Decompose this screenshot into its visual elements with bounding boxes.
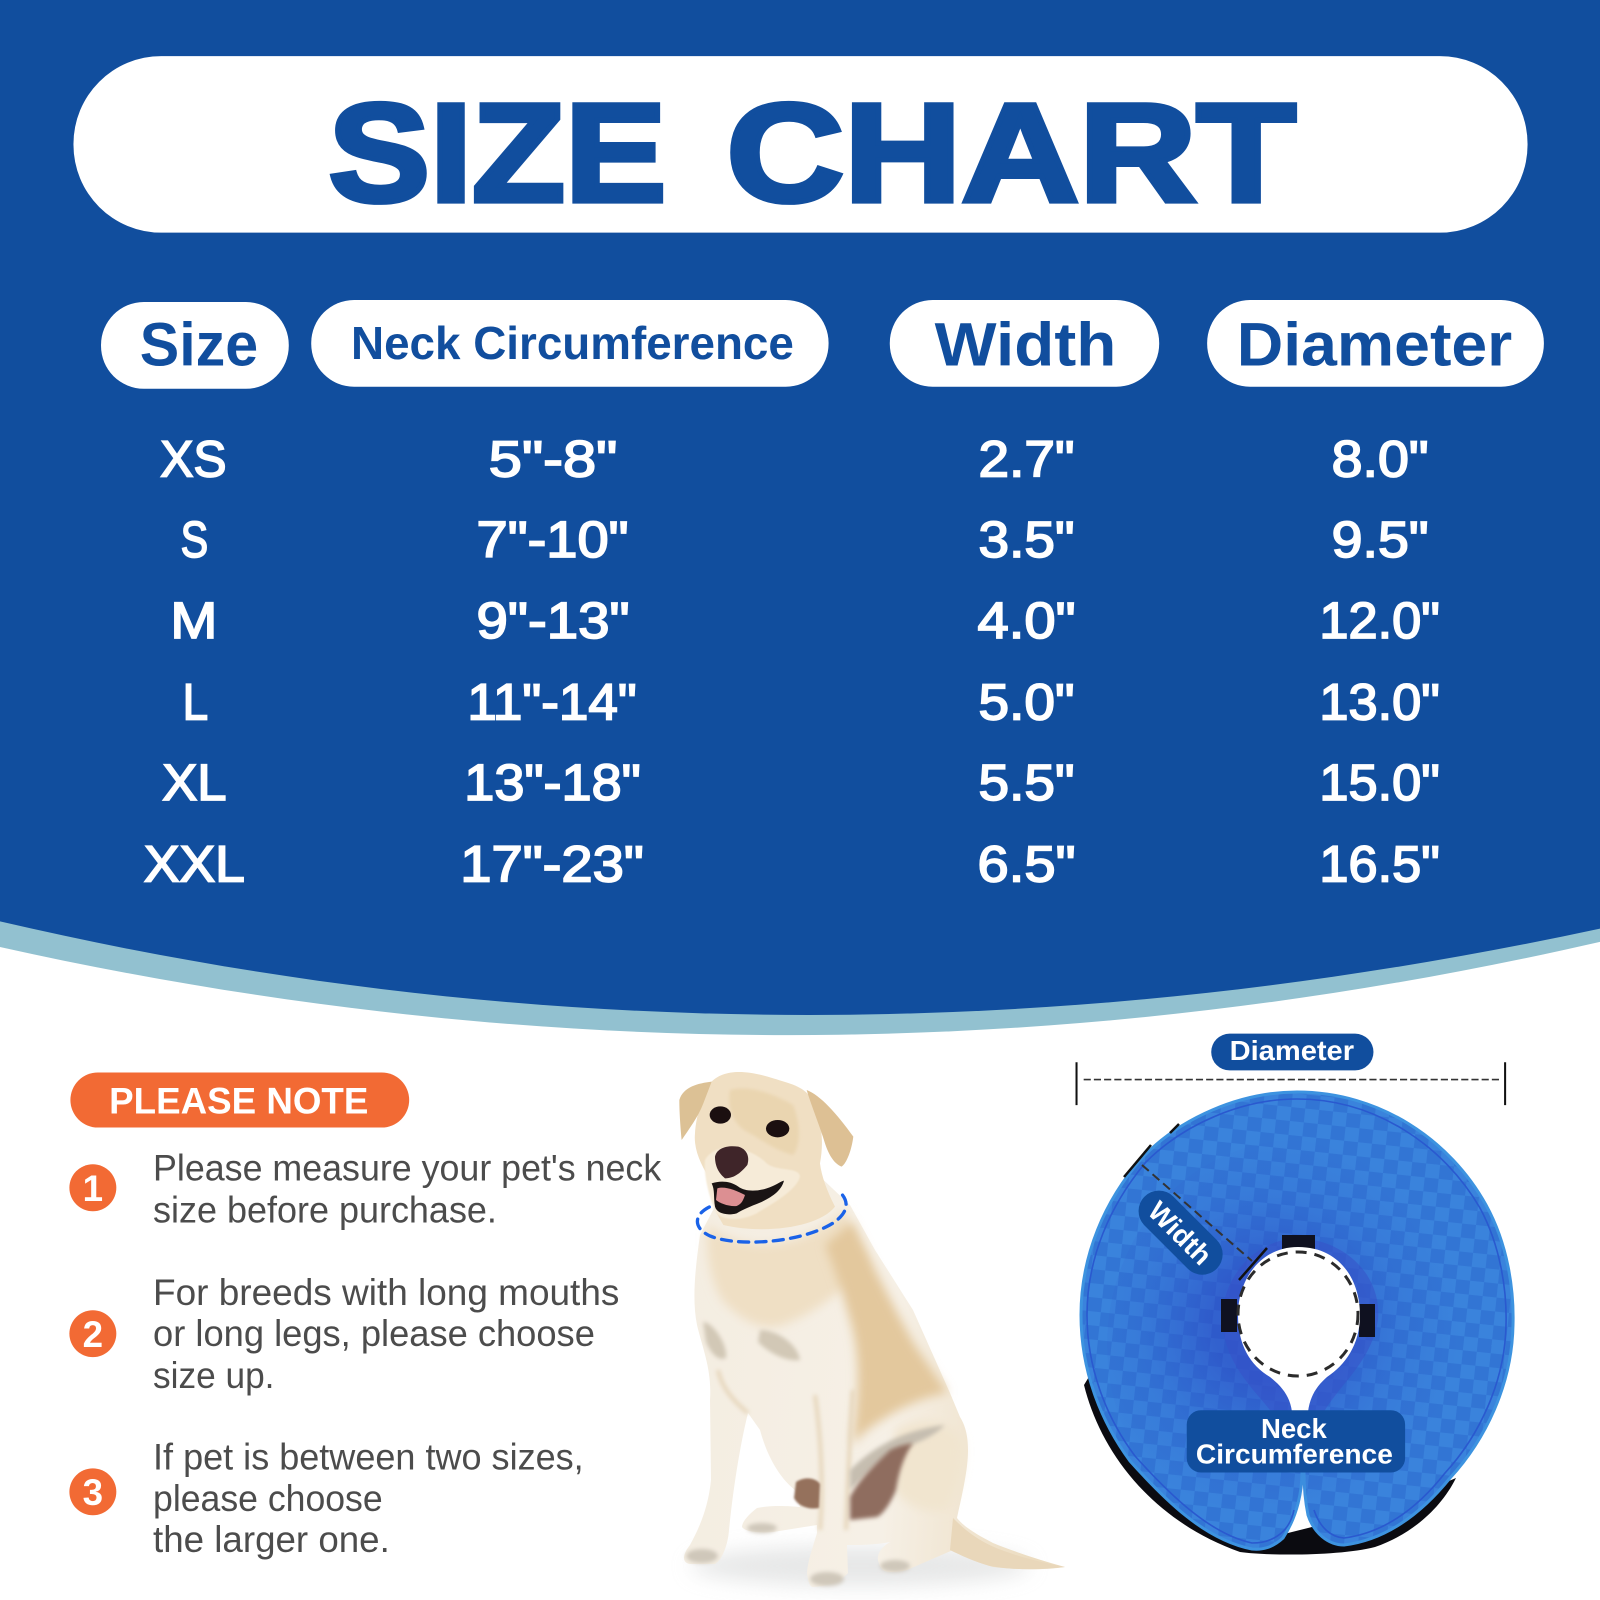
floor shadow [690, 1546, 1030, 1586]
header: width: Width [935, 310, 1116, 378]
title [73, 56, 1528, 233]
column: size: XL [162, 754, 227, 811]
label: neck circumference: Neck [1261, 1413, 1327, 1444]
column: neck circumference: 5"-8" [489, 431, 617, 488]
note 1: size before purchase. [153, 1189, 497, 1230]
column: size: M [170, 592, 217, 649]
header: diameter [1207, 300, 1544, 387]
column: width [978, 431, 1076, 893]
diameter measure [1077, 1034, 1505, 1105]
note 3: If pet is between two sizes, [153, 1436, 584, 1477]
note 2: size up. [153, 1355, 274, 1396]
width guide line [1142, 1165, 1252, 1261]
hind thigh [895, 1421, 963, 1511]
illustration: sitting dog [679, 1072, 1065, 1587]
left eye [710, 1106, 731, 1124]
label: diameter: Diameter [1230, 1035, 1354, 1066]
header: size: Size [140, 310, 258, 378]
header: neck circumference: Neck Circumference [351, 317, 794, 369]
note 2: or long legs, please choose [153, 1313, 595, 1354]
front leg edges [718, 1370, 853, 1530]
mouth [712, 1181, 784, 1214]
note 3: 3 [83, 1472, 103, 1513]
note 1: Please measure your pet's neck [153, 1148, 662, 1189]
curved light band [0, 0, 1600, 1035]
column: size: S [181, 511, 208, 568]
column: size: L [183, 673, 208, 730]
label: neck circumference: Circumference [1196, 1438, 1393, 1469]
header: width [890, 300, 1159, 387]
column: diameter: 13.0" [1319, 673, 1440, 730]
panel: please note [69, 1072, 662, 1560]
header: size [101, 302, 289, 389]
dog head [679, 1072, 853, 1242]
column: size: XXL [144, 836, 245, 893]
label: width: Width [1142, 1195, 1218, 1271]
label: diameter [1211, 1034, 1373, 1070]
dark hole rim [1222, 1238, 1378, 1425]
tan back shading [825, 1222, 948, 1445]
chest creases [703, 1322, 800, 1360]
column: neck circumference: 9"-13" [477, 592, 630, 649]
badge: please note: PLEASE NOTE [109, 1080, 368, 1121]
column: width: 6.5" [978, 836, 1076, 893]
note 1 [69, 1148, 662, 1230]
note 2: For breeds with long mouths [153, 1272, 619, 1313]
column: size [144, 431, 245, 893]
neck measure dashes [697, 1194, 846, 1242]
table headers [101, 300, 1544, 389]
right eye [766, 1120, 789, 1137]
column: diameter: 8.0" [1332, 431, 1429, 488]
muzzle [705, 1148, 800, 1219]
edge marks [1124, 1124, 1267, 1280]
velcro tab left [1221, 1299, 1237, 1332]
column: width: 2.7" [979, 431, 1074, 488]
column: width: 5.0" [979, 673, 1074, 730]
column: diameter [1319, 431, 1440, 893]
column: neck circumference: 11"-14" [467, 673, 637, 730]
tail [950, 1518, 1065, 1569]
collar ring [1081, 1092, 1513, 1549]
note 3 [69, 1436, 584, 1560]
note 2 [69, 1272, 619, 1396]
hind fur shadow [850, 1425, 945, 1490]
size table rows [144, 431, 1440, 893]
column: neck circumference: 13"-18" [464, 754, 641, 811]
column: width: 4.0" [978, 592, 1076, 649]
header: neck circumference [311, 300, 829, 387]
title: CHART [727, 74, 1296, 231]
note 2: 2 [83, 1314, 103, 1355]
header: diameter: Diameter [1237, 310, 1512, 378]
inner seam [1087, 1099, 1506, 1543]
label: neck circumference [1187, 1410, 1405, 1472]
forehead shade [729, 1088, 799, 1155]
column: width: 3.5" [979, 511, 1074, 568]
column: neck circumference [460, 431, 644, 893]
note 1: 1 [83, 1168, 103, 1209]
column: neck circumference: 17"-23" [460, 836, 644, 893]
neck opening [1238, 1247, 1360, 1412]
velcro tab top [1282, 1235, 1315, 1249]
column: width: 5.5" [979, 754, 1074, 811]
label: width [1130, 1182, 1231, 1283]
title: SIZE [329, 74, 666, 231]
illustration: inflatable collar [1081, 1092, 1513, 1555]
neck dashed circle [1238, 1252, 1358, 1376]
tongue [716, 1188, 745, 1206]
dog body [684, 1120, 1065, 1587]
left ear [679, 1082, 712, 1140]
column: size: XS [160, 431, 227, 488]
right ear [807, 1090, 853, 1167]
panel: blue header [0, 0, 1600, 1015]
hind leg fur shadow [850, 1443, 913, 1520]
note 3: the larger one. [153, 1519, 390, 1560]
belly dark patch [794, 1478, 820, 1509]
skull [695, 1072, 835, 1229]
black strap [1084, 1375, 1456, 1555]
column: neck circumference: 7"-10" [477, 511, 629, 568]
column: diameter: 15.0" [1319, 754, 1440, 811]
column: diameter: 12.0" [1319, 592, 1440, 649]
badge: please note [70, 1072, 409, 1128]
nose [715, 1146, 748, 1178]
velcro tab right [1359, 1304, 1375, 1337]
column: diameter: 16.5" [1319, 836, 1440, 893]
column: diameter: 9.5" [1332, 511, 1429, 568]
note 3: please choose [153, 1478, 383, 1519]
centre shading [1107, 1140, 1487, 1550]
paws [686, 1523, 910, 1586]
neck colouring [707, 1210, 868, 1327]
